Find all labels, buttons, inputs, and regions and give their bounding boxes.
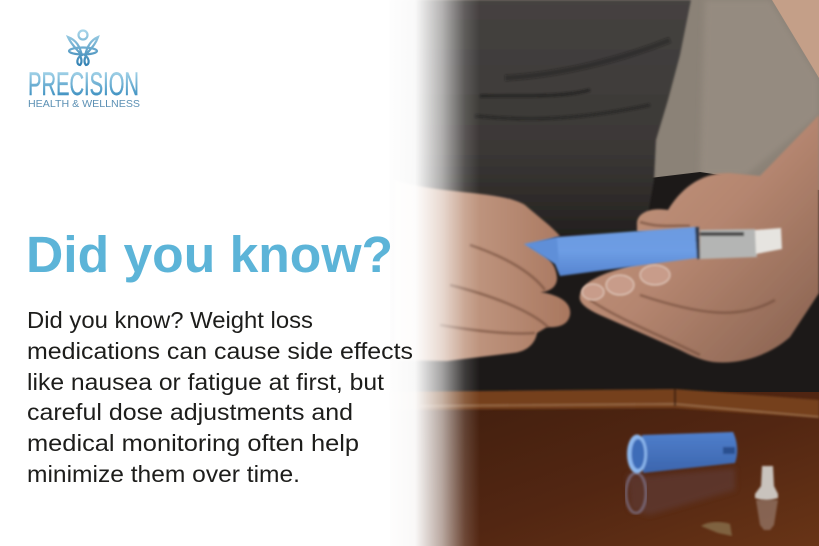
- body text: [27, 307, 413, 487]
- cap reflection: [627, 468, 735, 515]
- logo wordmark: PRECISION: [28, 66, 139, 102]
- grey shirt: [390, 0, 691, 260]
- right hand: [580, 115, 819, 363]
- fingernails: [582, 265, 670, 300]
- injection pen: [524, 227, 782, 276]
- line 3: like nausea or fatigue at first, but: [27, 369, 385, 395]
- photo: hands holding an injection pen over a table: [390, 0, 819, 546]
- line 2: medications can cause side effects: [27, 338, 413, 364]
- photo background wall: [390, 0, 819, 400]
- white fade over left of photo: [380, 0, 480, 546]
- finger creases: [440, 222, 775, 355]
- table edge: [390, 389, 819, 418]
- line 6: minimize them over time.: [27, 461, 300, 487]
- wooden table: [390, 392, 819, 546]
- sofa highlight: [700, 0, 819, 176]
- upper arm top right: [772, 0, 819, 78]
- heading: Did you know?: [26, 226, 393, 283]
- shirt folds: [475, 40, 670, 119]
- black trousers: [390, 172, 819, 400]
- left hand: [395, 180, 570, 361]
- logo tagline: HEALTH & WELLNESS: [28, 98, 140, 110]
- line 5: medical monitoring often help: [27, 430, 359, 456]
- blue pen cap on table: [627, 432, 737, 474]
- logo icon: figure with leaves: [68, 30, 98, 65]
- logo: [28, 30, 140, 110]
- line 4: careful dose adjustments and: [27, 399, 353, 425]
- line 1: Did you know? Weight loss: [27, 307, 313, 333]
- table spot: [701, 522, 732, 536]
- needle cap reflection: [756, 500, 778, 530]
- needle cap on table: [755, 466, 778, 500]
